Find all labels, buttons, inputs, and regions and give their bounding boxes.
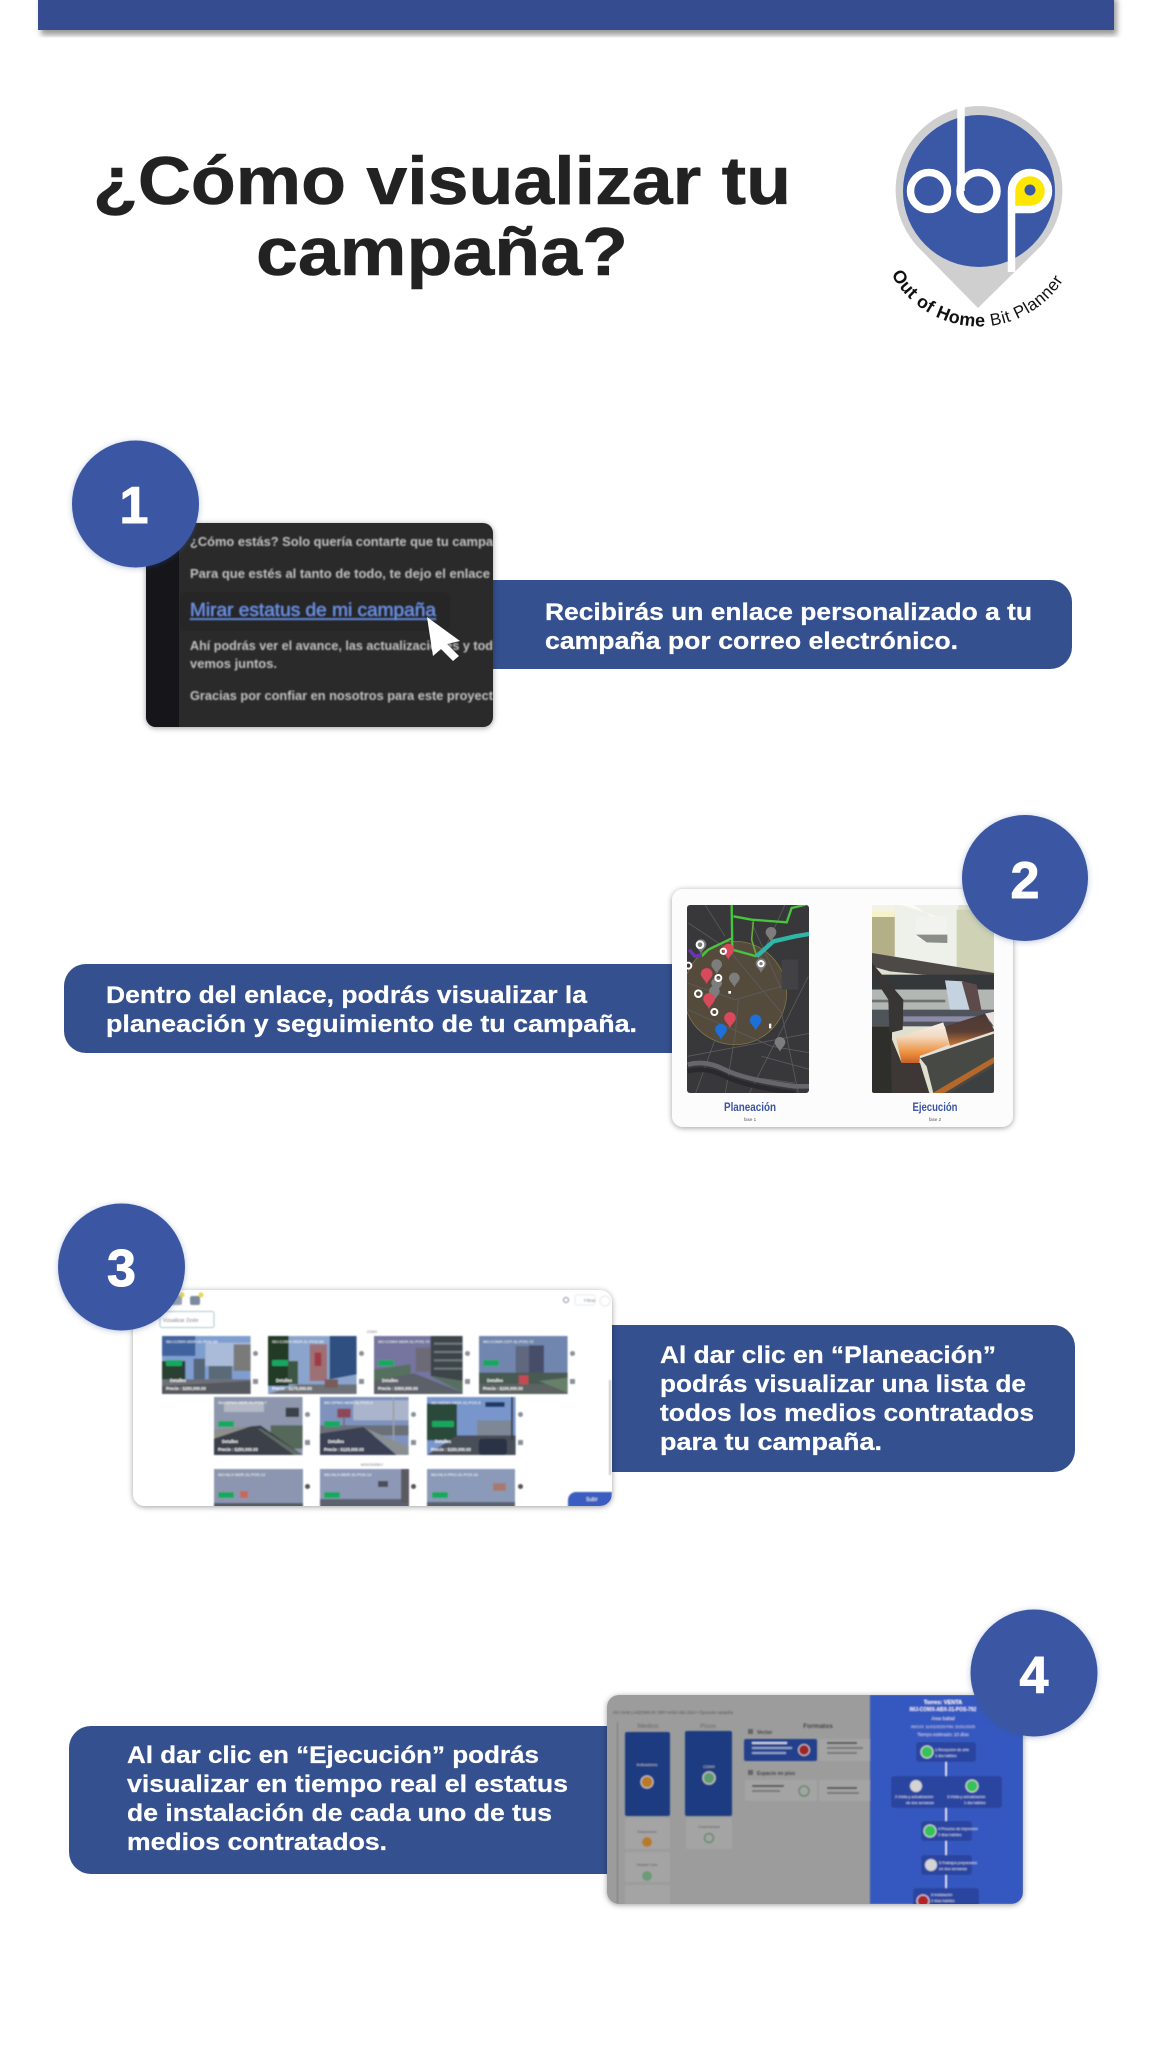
tile 1: IMJ-COMX-MDR-31-POS-66 — [166, 1339, 218, 1344]
tile 6 — [320, 1397, 416, 1455]
step 4 screenshot: execution status — [607, 1695, 1023, 1908]
status board: Medios — [638, 1723, 659, 1730]
icon: map pin — [896, 106, 1062, 308]
tile 10: IMJ-NLX-PRO-31-POS-16 — [431, 1472, 479, 1477]
status board: CDMX — [703, 1764, 715, 1769]
tile 5: Precio : $250,000.00 — [218, 1447, 258, 1452]
button: add — [566, 1490, 612, 1506]
status board: Formatos — [803, 1723, 833, 1730]
panel: status flow: 2.Visita y actualización — [895, 1795, 933, 1799]
tile 8: IMJ-NLX-MDR-31-POS-12 — [218, 1472, 266, 1477]
step 3 screenshot: media list — [133, 1290, 612, 1510]
toolbar icons: Vizualizar Zeste — [163, 1318, 199, 1324]
step 2 text bar: Dentro del enlace, podrás visualizar la — [106, 982, 587, 1009]
tile 2: Precio : $175,000.00 — [272, 1386, 312, 1391]
step 4 text bar: medios contratados. — [127, 1829, 387, 1856]
step 2 number badge — [962, 815, 1088, 941]
tile 7: IMJ-MDMX-MDR-31-POS-5 — [431, 1400, 481, 1405]
tile 1: Detalles — [170, 1378, 187, 1383]
status board: Global Cars — [636, 1862, 658, 1867]
step 1 screenshot: email with link: Ahí podrás ver el avance, las actualizaciones y tod — [190, 638, 493, 653]
photo: printer, ejecución — [870, 903, 996, 1095]
step 2 panel: phases — [672, 889, 1013, 1127]
step 4 text bar — [69, 1726, 620, 1874]
tile 9 — [320, 1469, 416, 1509]
tile 5 — [214, 1397, 310, 1455]
step 2 text bar: planeación y seguimiento de tu campaña. — [106, 1011, 637, 1038]
status board: Pisos — [700, 1723, 717, 1730]
map image: planeación — [683, 903, 811, 1095]
button: add: Subir — [586, 1497, 598, 1503]
tile 7: Precio : $150,000.00 — [431, 1447, 471, 1452]
panel: status flow: 2 días hábiles — [931, 1899, 955, 1903]
tile 10 — [427, 1469, 523, 1509]
title — [93, 143, 791, 290]
step 1 number badge: 1 — [120, 477, 148, 535]
step 4 number badge — [970, 1610, 1098, 1736]
status board: Indicadores — [637, 1762, 657, 1767]
status board — [613, 1710, 871, 1907]
panel: status flow: 1 día hábiles — [935, 1754, 957, 1758]
panel: status flow: 1.Recepción de arte — [935, 1748, 969, 1752]
panel: status flow: IMJ-COMX-ABX-31-POS-792 — [910, 1707, 977, 1713]
panel: status flow: 1 día hábiles — [964, 1801, 986, 1805]
label: fase 2: fase 2 — [929, 1117, 942, 1122]
status board: Estaciones — [637, 1829, 657, 1834]
step 2 text bar — [64, 964, 690, 1053]
step 4 text bar: de instalación de cada uno de tus — [127, 1800, 552, 1827]
label: Ejecución: Ejecución — [912, 1102, 958, 1114]
tile 6: IMJ-SPMX-MDR-31-POS-9 — [324, 1400, 373, 1405]
panel: status flow: de dos semanas — [906, 1801, 934, 1805]
logo: Out of Home Bit Planner — [894, 106, 1062, 327]
panel: status flow: INICIO: 11/01/2025 FIN: 21/01/2025 — [911, 1724, 976, 1729]
tile 8 — [214, 1469, 310, 1509]
tile 2 — [268, 1336, 364, 1394]
step 3 text bar: todos los medios contratados — [660, 1400, 1034, 1427]
step 2 number badge: 2 — [1011, 852, 1039, 910]
tile 4: IMJ-COMX-CDT-31-POS-72 — [483, 1339, 534, 1344]
toolbar icons: MONTERREY — [361, 1463, 384, 1467]
step 1 number badge — [72, 440, 199, 568]
panel: status flow: 3.Visita y actualización — [947, 1795, 985, 1799]
icon: mouse cursor — [427, 617, 460, 661]
tile 6: Precio : $125,000.00 — [324, 1447, 364, 1452]
panel: status flow: 5.Trabajos preparados — [939, 1861, 977, 1865]
icon: p counter dot — [1024, 184, 1036, 196]
step 1 screenshot: email with link: Gracias por confiar en nosotros para este proyect — [190, 688, 494, 703]
panel: status flow: Torres: VENTA — [924, 1700, 962, 1706]
tile 2: Detalles — [276, 1378, 293, 1383]
panel: status flow: 4.Proceso de impresión — [938, 1827, 978, 1831]
panel: status flow — [870, 1695, 1023, 1908]
step 1 text bar — [440, 580, 1072, 669]
logo tagline: Out of Home Bit Planner — [894, 270, 1062, 327]
step 3 text bar — [600, 1325, 1075, 1472]
step 4 text bar: Al dar clic en “Ejecución” podrás — [127, 1742, 539, 1769]
tile 3: IMJ-COMX-MDR-31-POS-70 — [378, 1339, 430, 1344]
tile 3: Precio : $300,000.00 — [378, 1386, 418, 1391]
step 1 text bar: Recibirás un enlace personalizado a tu — [545, 599, 1032, 626]
tile 5: IMJ-SPMX-MDR-31-POS-7 — [218, 1400, 267, 1405]
step 4 text bar: visualizar en tiempo real el estatus — [127, 1771, 568, 1798]
tile 3 — [374, 1336, 470, 1394]
title: campaña? — [256, 214, 628, 290]
tile 6: Detalles — [328, 1439, 345, 1444]
step 1 screenshot: email with link — [146, 523, 494, 727]
tile 2: IMJ-COMX-MDR-31-POS-68 — [272, 1339, 324, 1344]
label: Planeación: Planeación — [724, 1102, 776, 1114]
step 3 text bar: para tu campaña. — [660, 1429, 882, 1456]
toolbar icons: CDMX — [367, 1330, 378, 1334]
tile 7 — [427, 1397, 523, 1455]
tile 1 — [162, 1336, 258, 1394]
status board: Cuernavaca — [698, 1824, 721, 1829]
panel: status flow: Área Sabial — [931, 1715, 955, 1721]
tile 5: Detalles — [222, 1439, 239, 1444]
tile 4: Precio : $230,000.00 — [483, 1386, 523, 1391]
tile 7: Detalles — [435, 1439, 452, 1444]
step 1 text bar: campaña por correo electrónico. — [545, 628, 958, 655]
title: ¿Cómo visualizar tu — [93, 143, 791, 219]
status board: Espacio en piso — [757, 1771, 795, 1777]
top banner — [38, 0, 1114, 30]
step 1 screenshot: email with link: vemos juntos. — [190, 656, 277, 671]
tile 4: Detalles — [487, 1378, 504, 1383]
step 1 screenshot: email with link: Mirar estatus de mi campaña — [190, 600, 437, 620]
panel: status flow: Tiempo estimado: 10 días — [917, 1732, 970, 1737]
panel: status flow: 6.Instalación — [931, 1893, 952, 1897]
toolbar icons — [160, 1292, 611, 1475]
label: fase 1: fase 1 — [744, 1117, 757, 1122]
tile 1: Precio : $250,000.00 — [166, 1386, 206, 1391]
step 1 screenshot: email with link: Para que estés al tanto de todo, te dejo el enlace — [190, 566, 490, 581]
tile 3: Detalles — [382, 1378, 399, 1383]
step 3 text bar: podrás visualizar una lista de — [660, 1371, 1026, 1398]
blue disc — [903, 115, 1055, 267]
step 3 number badge — [58, 1204, 185, 1330]
tile 9: IMJ-NLX-MDR-31-POS-14 — [324, 1472, 372, 1477]
obp letters — [910, 104, 1048, 272]
step 3 number badge: 3 — [107, 1240, 136, 1298]
step 3 text bar: Al dar clic en “Planeación” — [660, 1342, 996, 1369]
panel: status flow: 2 días hábiles — [938, 1833, 962, 1837]
status board: IOA VIAM LANDOWN BY ORP HANS ABX 2024 > Ejecución campaña — [613, 1710, 733, 1716]
step 4 number badge: 4 — [1020, 1647, 1049, 1705]
toolbar icons: Filtrar — [584, 1298, 596, 1303]
step 1 screenshot: email with link: ¿Cómo estás? Solo quería contarte que tu campa — [190, 534, 494, 549]
status board: Vector — [757, 1730, 772, 1736]
tile 4 — [479, 1336, 575, 1394]
panel: status flow: en dos semanas — [939, 1867, 967, 1871]
